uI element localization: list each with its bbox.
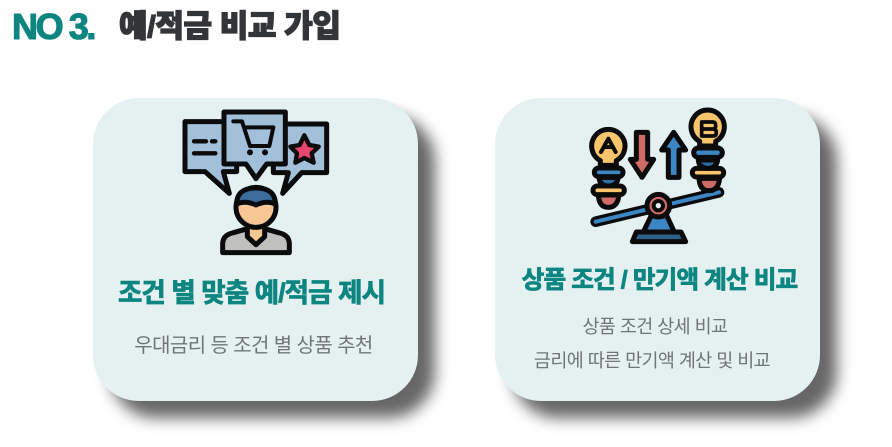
- icon: balance scale with bulbs: [589, 108, 727, 244]
- heading: 조건 별 맞춤 예/적금 제시: [118, 278, 385, 308]
- description: [534, 316, 770, 371]
- description: 상품 조건 상세 비교: [582, 316, 727, 337]
- icon: customer with speech bubbles: [182, 110, 330, 256]
- description: 우대금리 등 조건 별 상품 추천: [134, 335, 373, 357]
- panel: personalized products: [93, 98, 418, 401]
- description: 금리에 따른 만기액 계산 및 비교: [534, 350, 770, 371]
- title: 예/적금 비교 가입: [119, 9, 340, 44]
- section number: NO 3.: [12, 6, 94, 47]
- panel: product comparison: [495, 98, 820, 401]
- heading: 상품 조건 / 만기액 계산 비교: [522, 267, 797, 294]
